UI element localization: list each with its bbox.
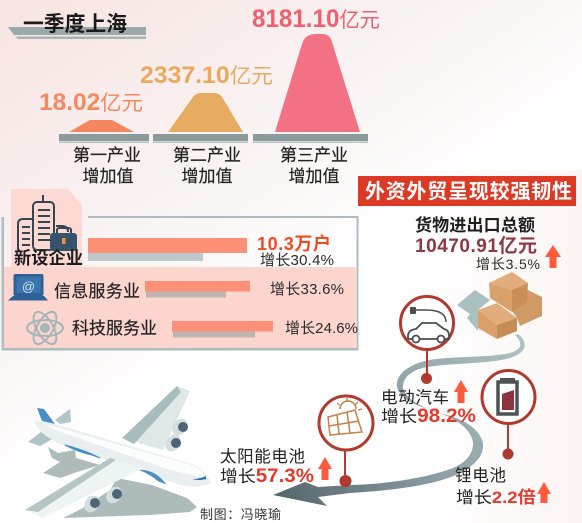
label: 新设企业: 新设企业 [14,248,83,268]
chart: secondary industry value added: 第二产业 [173,146,241,165]
stat: electric cars: 电动汽车 [381,388,449,407]
chart: secondary industry value added: 2337.10亿元 [140,62,273,89]
chart: primary industry value added: 增加值 [82,167,134,186]
label: 科技服务业: 科技服务业 [72,319,157,338]
stat: solar cells [220,447,332,487]
icon: cardboard boxes [457,272,542,339]
chart: tertiary industry value added: 第三产业 [280,146,348,165]
stat: lithium batteries: 锂电池 [455,466,506,485]
stat: lithium batteries [455,466,551,507]
stat: electric cars: 增长98.2% [381,406,476,427]
plane shadow [43,447,197,518]
stat: total goods trade: 增长3.5% [476,256,540,272]
banner: 外资外贸呈现较强韧性: 外资外贸呈现较强韧性 [365,179,572,203]
chart: primary industry value added: 第一产业 [73,146,141,165]
bar: information services [145,281,250,298]
pin: solar panel [319,396,373,487]
title: 一季度上海 [8,13,146,39]
icon: atom [27,308,63,348]
banner: 外资外贸呈现较强韧性 [358,176,576,206]
stat: lithium batteries: 增长2.2倍 [456,487,536,507]
value: 增长24.6%: 增长24.6% [285,320,358,337]
chart: secondary industry value added [140,62,273,186]
chart: tertiary industry value added [252,5,380,186]
value: 10.3万户: 10.3万户 [257,233,331,254]
credit: 制图：冯晓瑜: 制图：冯晓瑜 [200,507,281,522]
icon: laptop [8,274,48,300]
arrow: electric cars up [454,380,468,403]
stat: electric cars [381,380,476,427]
chart: secondary industry value added: 增加值 [182,167,232,186]
chart: tertiary industry value added: 8181.10亿元 [252,5,380,33]
chart: primary industry value added [39,89,149,186]
stat: solar cells: 太阳能电池 [220,447,305,466]
fuselage [35,420,211,487]
value: 增长33.6%: 增长33.6% [270,281,344,298]
bar: new enterprises [88,238,247,261]
stat: total goods trade: 10470.91亿元 [415,235,537,257]
arrow: solar cells up [318,457,332,480]
pin: electric car [400,296,454,384]
arrow: lithium batteries up [537,482,551,503]
illustration: airplane [25,386,211,518]
near wing [25,458,143,518]
title: 一季度上海: 一季度上海 [23,13,127,36]
value: 增长30.4%: 增长30.4% [260,252,334,269]
road arrow [273,334,525,506]
far wing [122,386,190,450]
stat: solar cells: 增长57.3% [220,466,314,487]
chart: tertiary industry value added: 增加值 [288,167,340,186]
box shadow [457,290,490,331]
icon: laptop: @ [22,279,35,294]
panel: new enterprises and services [2,189,358,350]
tail fin [37,408,55,424]
pin: lithium battery [482,370,535,460]
label: 信息服务业: 信息服务业 [54,282,140,301]
stat: total goods trade [415,215,561,272]
chart: primary industry value added: 18.02亿元 [39,89,143,116]
arrow: trade up [545,245,561,268]
icon: office buildings and briefcase [11,189,82,267]
stat: total goods trade: 货物进出口总额 [415,215,535,235]
bar: technology services [172,321,273,338]
